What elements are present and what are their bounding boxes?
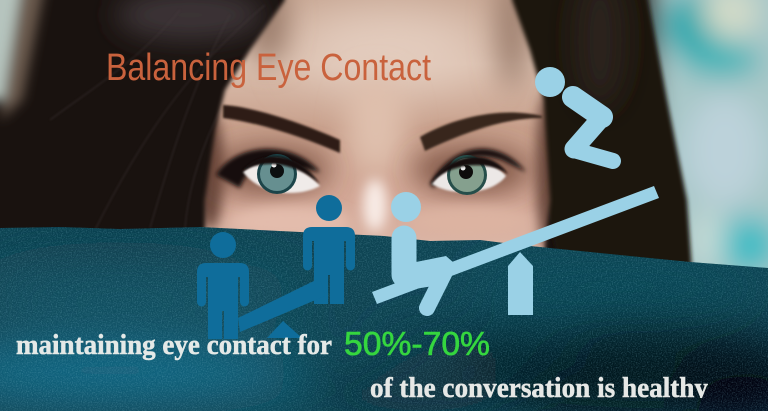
- caption line one: maintaining eye contact for: [16, 330, 332, 361]
- icon: balanced seesaw, dark blue figures: [197, 195, 355, 339]
- icon: unbalanced seesaw, light blue figures: [372, 67, 659, 315]
- highlighted percentage: 50%-70%: [344, 325, 490, 362]
- right eye: [430, 149, 526, 195]
- icon: seated figure: [391, 192, 454, 308]
- title: Balancing Eye Contact: [106, 47, 431, 89]
- icon: tilted seesaw plank: [372, 186, 659, 304]
- icon: seesaw post: [508, 252, 533, 315]
- teal knit scarf: [0, 220, 768, 411]
- caption line two: of the conversation is healthy: [370, 373, 708, 404]
- icon: right standing person: [303, 195, 355, 304]
- woman's face: [202, 0, 552, 248]
- icon: dark seesaw plank: [238, 278, 325, 332]
- icon: figure thrown into the air: [535, 67, 613, 161]
- icon: left standing person: [197, 232, 249, 339]
- icon: dark seesaw pivot: [267, 321, 302, 338]
- right eyebrow: [420, 112, 542, 151]
- left eye: [216, 149, 320, 194]
- left eyebrow: [223, 105, 340, 153]
